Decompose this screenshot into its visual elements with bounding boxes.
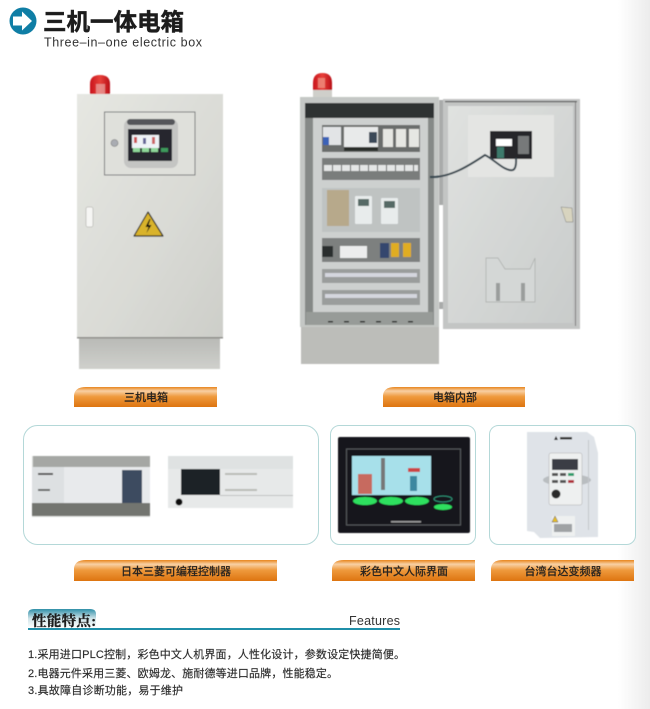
caption tab: 三机电箱: 三机电箱: [124, 390, 168, 404]
PLC unit 1: [32, 456, 150, 517]
caption tab: inverter: [491, 560, 634, 581]
cabinet shell: [300, 97, 439, 327]
HMI rear: [490, 131, 532, 159]
terminal rail 2: [322, 290, 420, 305]
terminal rail 1: [322, 269, 420, 283]
subtitle: Three–in–one electric box: [44, 36, 203, 50]
feature list: 2.电器元件采用三菱、欧姆龙、施耐德等进口品牌，性能稳定。: [28, 666, 338, 680]
photo: open door: [430, 99, 580, 329]
inverter photo: [527, 432, 598, 538]
photo: cabinet interior: [300, 73, 439, 364]
icon: arrow in circle: [10, 8, 36, 34]
caption tab: 电箱内部: [383, 387, 525, 407]
caption tab: HMI: [332, 560, 475, 581]
caption tab: HMI: 彩色中文人际界面: [360, 564, 448, 578]
caption tab: PLC: [74, 560, 277, 581]
door handle: [86, 207, 93, 227]
card: HMI touch screen: [330, 426, 476, 544]
caption tab: 三机电箱: [74, 387, 217, 407]
relay and contactor row: [322, 238, 420, 262]
power supply and inverters row: [322, 188, 420, 232]
terminal row: [322, 158, 420, 180]
door inner panel: [448, 106, 573, 323]
cable: [430, 155, 516, 177]
feature list: 1.采用进口PLC控制，彩色中文人机界面，人性化设计，参数设定快捷简便。: [28, 647, 405, 661]
feature list: [28, 647, 405, 697]
mounting plate: [468, 115, 554, 177]
section heading: features: 性能特点:: [32, 612, 96, 630]
section heading: features: [28, 609, 400, 630]
cabinet base: [79, 338, 220, 369]
right edge shading: [618, 0, 650, 709]
caption tab: PLC: 日本三菱可编程控制器: [121, 564, 231, 578]
card: PLC controllers: [24, 426, 318, 544]
caption tab: inverter: 台湾台达变频器: [524, 564, 602, 578]
title: 三机一体电箱: [43, 9, 184, 35]
icon: beacon: [313, 73, 332, 97]
section heading: features: Features: [349, 614, 400, 628]
icon: high voltage warning: [134, 212, 163, 236]
mounting plate: [313, 118, 428, 312]
door frame: [443, 99, 580, 329]
caption tab: 电箱内部: 电箱内部: [433, 390, 477, 404]
PLC row: [322, 125, 420, 152]
cabinet door: [77, 94, 223, 338]
door latch: [561, 207, 573, 222]
hinge strip: [439, 100, 443, 205]
icon: red beacon: [90, 75, 110, 94]
card: Delta inverter: [490, 426, 636, 544]
PLC unit 2: [168, 456, 293, 508]
vent holes: [328, 321, 413, 322]
document holder: [486, 258, 535, 302]
HMI screen: [128, 129, 172, 161]
touch screen photo: [338, 437, 470, 533]
control panel recess: [104, 112, 195, 175]
header: [10, 8, 203, 50]
photo: closed electric cabinet: [77, 75, 223, 369]
feature list: 3.具故障自诊断功能，易于维护: [28, 683, 183, 697]
